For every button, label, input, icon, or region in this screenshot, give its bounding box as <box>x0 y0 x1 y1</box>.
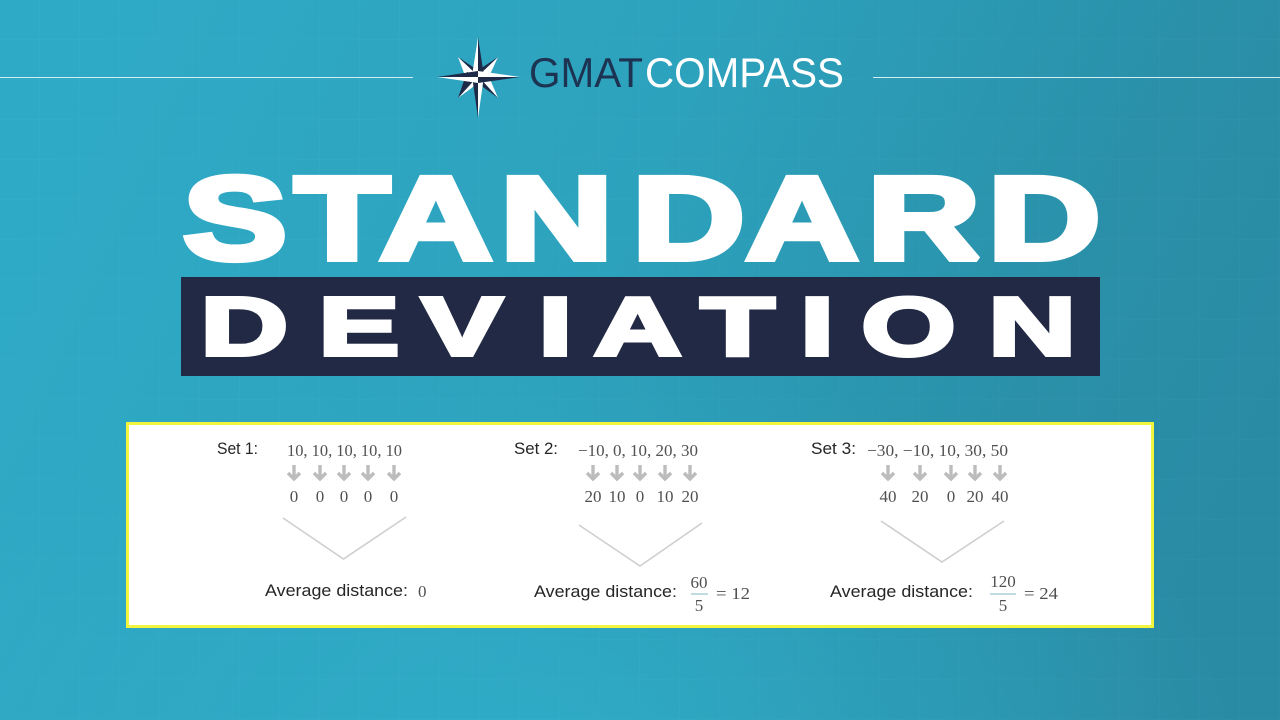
set 3: −30, −10, 10, 30, 50 <box>867 441 1008 460</box>
fraction: 120/5 = 24: = 24 <box>1024 584 1059 603</box>
fraction: 60/5 = 12: 60 <box>690 573 708 592</box>
icon: compass star <box>437 37 520 118</box>
logo: GMAT Compass <box>437 37 844 118</box>
set 2: 20 <box>584 487 602 506</box>
set 1: 0 <box>364 487 372 506</box>
wordmark: GMAT <box>529 49 643 96</box>
arrows: set 1 <box>288 465 400 479</box>
set 1 <box>217 440 426 601</box>
subtitle banner: DEVIATION: DEVIATION <box>201 280 1076 372</box>
set 2: 10 <box>656 487 674 506</box>
set 1: 0 <box>390 487 398 506</box>
fraction: 60/5 = 12: 5 <box>695 596 703 615</box>
set 2: Average distance: <box>534 583 677 601</box>
fraction: 60/5 = 12 <box>690 573 750 615</box>
arrows: set 2 <box>587 465 696 479</box>
set 3: 20 <box>966 487 984 506</box>
set 1: 10, 10, 10, 10, 10 <box>287 441 402 460</box>
set 2: 10 <box>608 487 626 506</box>
fraction: 120/5 = 24: 120 <box>990 572 1016 591</box>
set 1: 0 <box>340 487 348 506</box>
fraction: 120/5 = 24: 5 <box>999 596 1007 615</box>
set 1: Set 1: <box>217 440 258 458</box>
wordmark: COMPASS <box>645 49 844 96</box>
set 2: 20 <box>682 487 698 506</box>
set 3: Average distance: <box>830 583 973 601</box>
set 2: −10, 0, 10, 20, 30 <box>578 441 698 460</box>
fraction: 120/5 = 24 <box>990 572 1059 615</box>
set 2: 0 <box>636 487 644 506</box>
set 1: Average distance: <box>265 582 408 600</box>
set 2: Set 2: <box>514 440 558 458</box>
fraction: 60/5 = 12: = 12 <box>716 584 750 603</box>
arrows: set 3 <box>882 465 1006 479</box>
panel: three sets example <box>128 424 1152 626</box>
set 3: 0 <box>947 487 955 506</box>
set 3: 40 <box>880 487 896 506</box>
set 3 <box>811 440 1059 615</box>
set 1: 0 <box>316 487 324 506</box>
set 1: 0 <box>418 582 426 601</box>
set 3: 20 <box>912 487 928 506</box>
set 2 <box>514 440 750 615</box>
set 3: 40 <box>992 487 1008 506</box>
title: STANDARD: STANDARD <box>183 153 1100 285</box>
set 1: 0 <box>290 487 298 506</box>
set 3: Set 3: <box>811 440 856 458</box>
